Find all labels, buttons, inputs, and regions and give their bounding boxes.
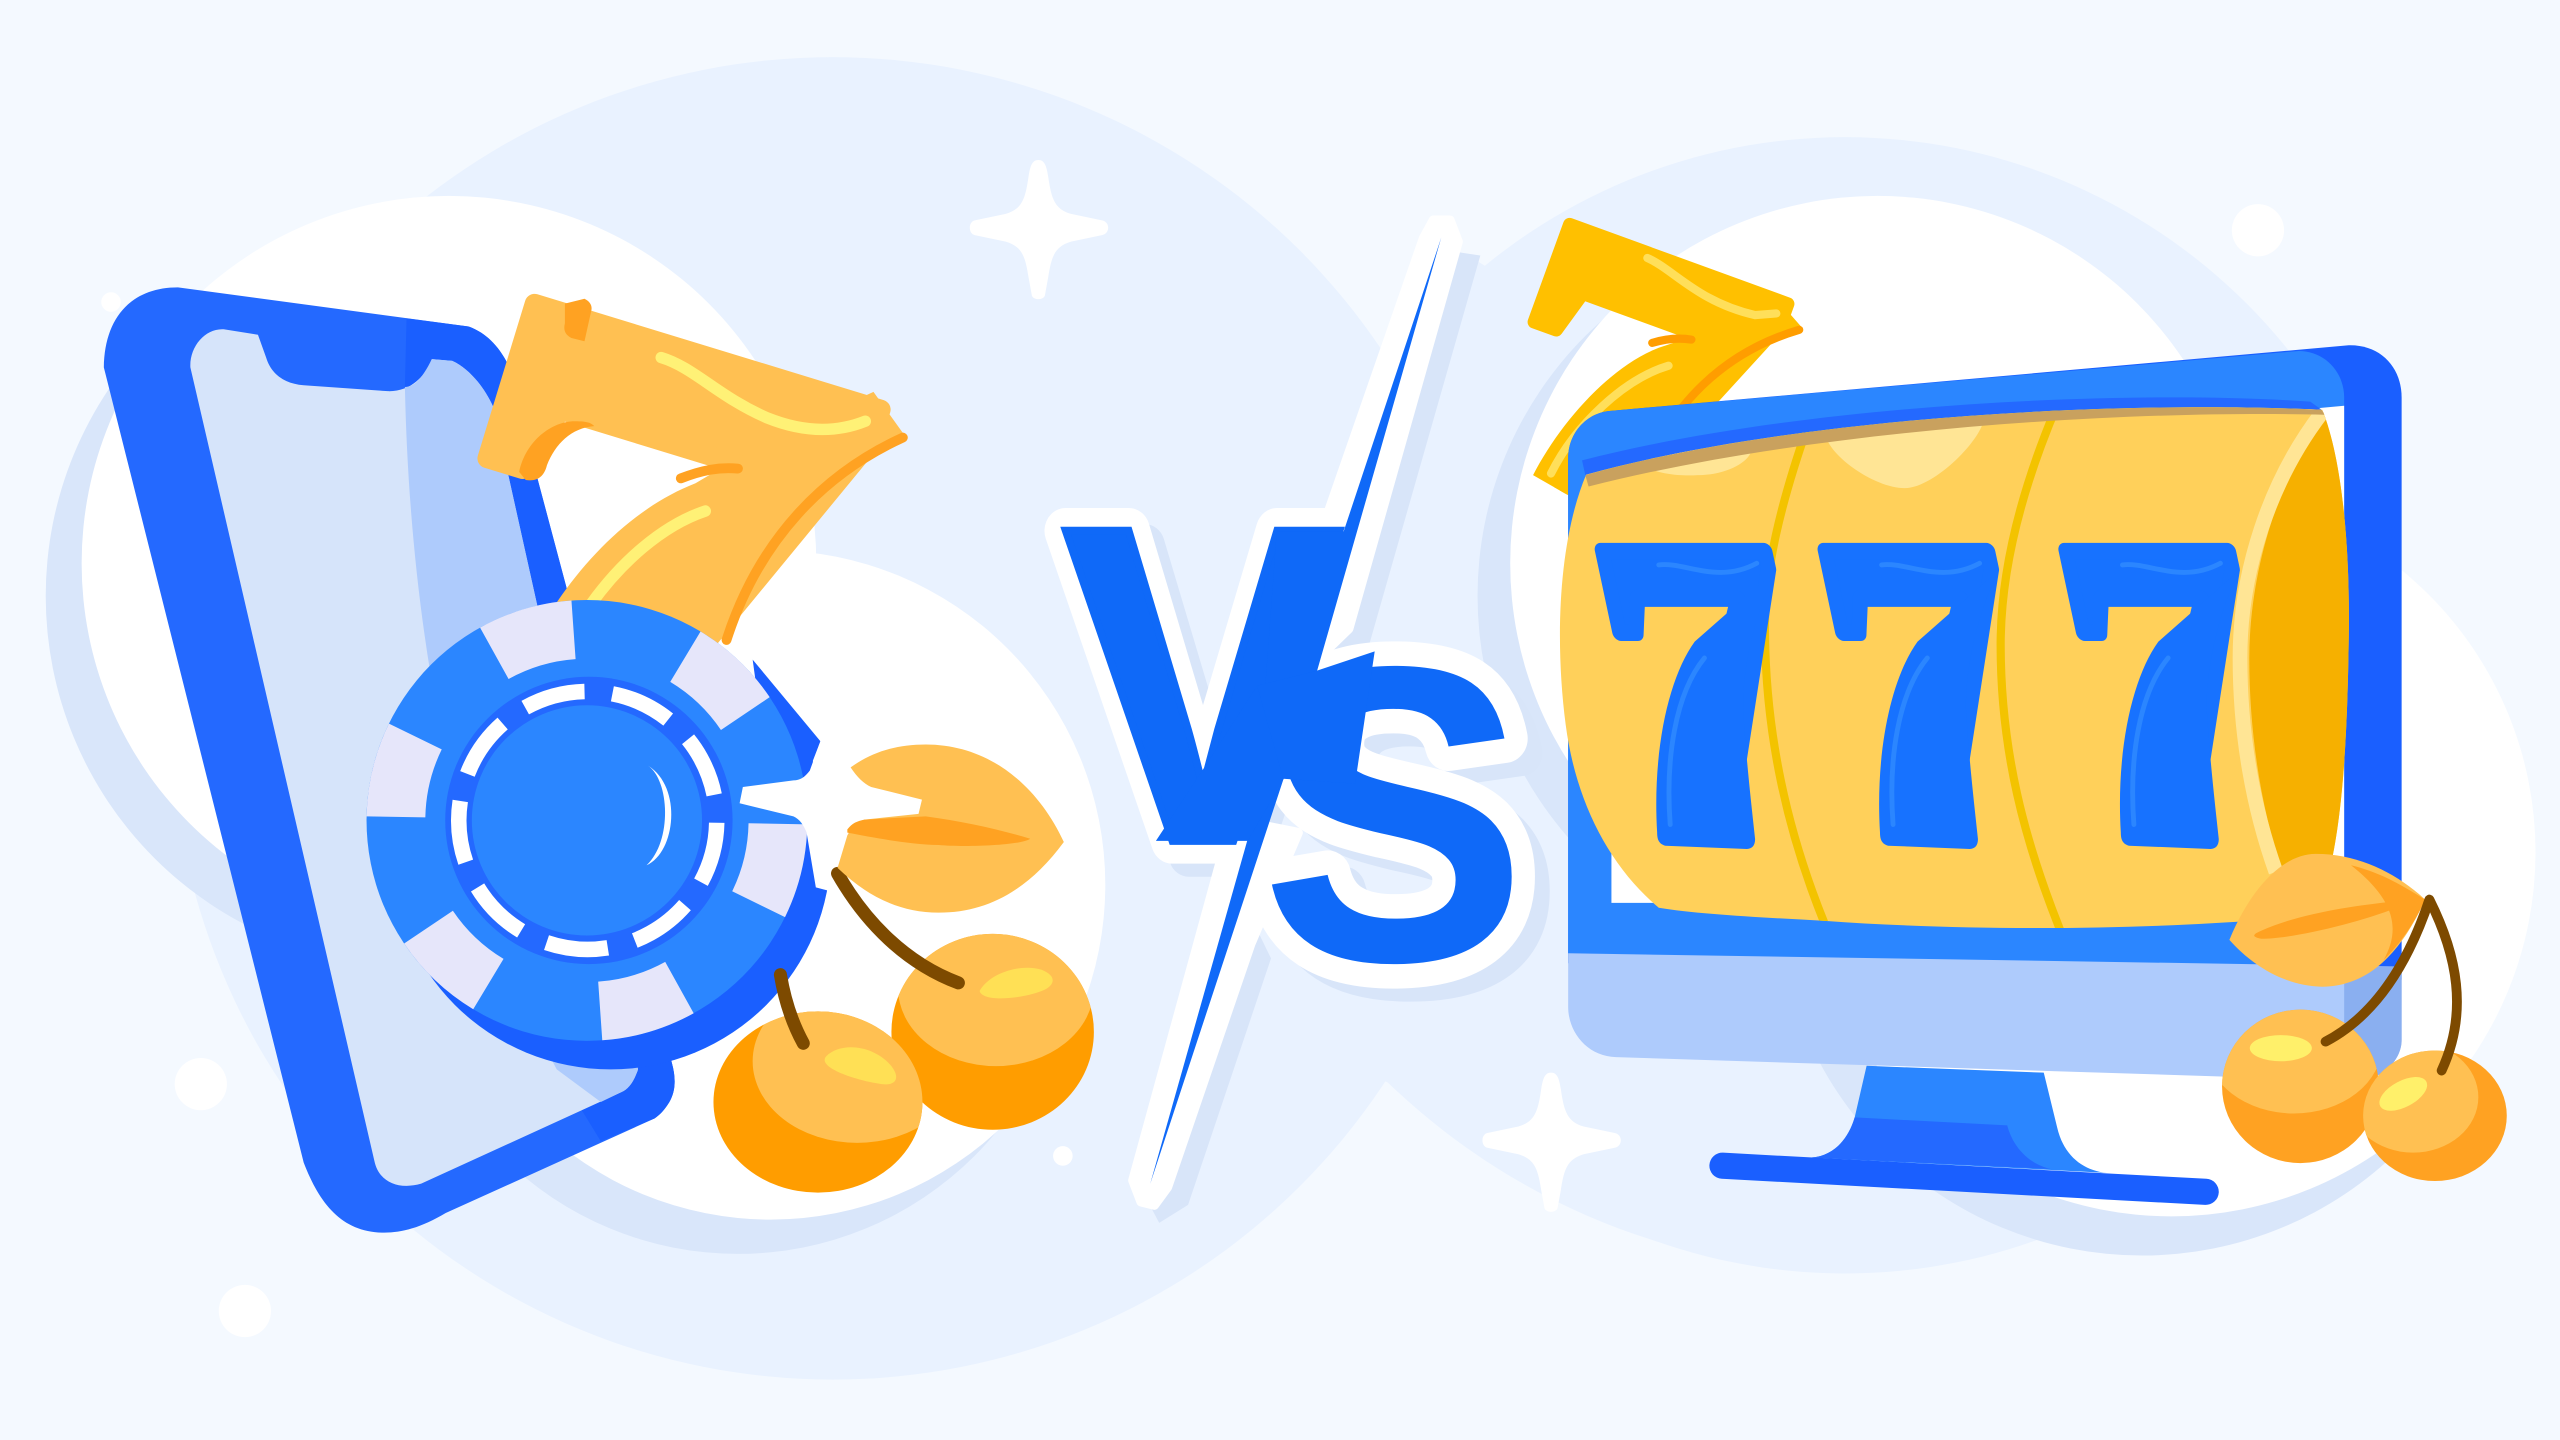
lightning bolt — [1265, 237, 1441, 686]
decorative dots — [101, 204, 2284, 1337]
slot seven left: 7 — [267, 95, 961, 1137]
reel brown band — [1585, 407, 2325, 487]
smartphone — [104, 287, 675, 1233]
leaf — [838, 744, 1064, 913]
reel end — [2249, 412, 2349, 866]
reel seven stems — [1656, 570, 2240, 849]
slot seven right: 7 — [1374, 91, 1845, 764]
vs outline — [1063, 220, 1527, 1205]
seven shadow edges — [681, 438, 903, 640]
seven right shadow — [1652, 330, 1799, 408]
reel sevens: 7 — [1781, 447, 2079, 932]
poker chip — [327, 561, 865, 1080]
vs letters: S — [1260, 580, 1527, 1050]
vs bolt and letters — [1063, 220, 1544, 1223]
icon: star bottom — [1482, 1073, 1621, 1212]
desktop monitor — [1558, 345, 2402, 1192]
slot seven right — [1528, 218, 1804, 495]
reel separators — [1765, 406, 2060, 931]
cherries right — [2206, 854, 2507, 1181]
cherry right — [2363, 1050, 2507, 1181]
reel top shadow — [1582, 397, 2322, 475]
monitor stand — [1722, 1066, 2206, 1192]
left white backdrop — [46, 196, 1105, 1254]
stems — [780, 873, 958, 1043]
vs outline: V — [1063, 434, 1344, 937]
seven right swoop — [1533, 302, 1802, 495]
chip notch — [740, 741, 865, 891]
monitor screen — [1611, 406, 2344, 903]
vs shadow — [1079, 249, 1544, 1223]
seven stem swoop — [553, 392, 906, 640]
reel seven highlights — [1659, 563, 2220, 824]
reel sevens: 7 — [1558, 447, 1856, 932]
cherries left — [713, 744, 1094, 1193]
reel sevens: 7 — [2022, 447, 2319, 932]
right cherry — [891, 934, 1094, 1130]
vs letters — [1063, 237, 1527, 1184]
seven right highlight — [1551, 258, 1776, 473]
cherry left — [2222, 1010, 2378, 1164]
leaf — [2229, 854, 2425, 987]
right white backdrop — [1478, 196, 2536, 1256]
vs letters: V — [1063, 434, 1344, 937]
icon: star top — [970, 160, 1108, 299]
reel sevens — [1558, 447, 2319, 932]
vs outline: S — [1260, 580, 1527, 1050]
seven highlight — [591, 358, 865, 604]
vs shadow: V — [1079, 449, 1361, 952]
monitor chin — [1568, 953, 2402, 1081]
chip rim stripes — [327, 561, 847, 1080]
monitor body — [1568, 345, 2402, 980]
slot reel — [1560, 406, 2359, 931]
stems — [2326, 900, 2457, 1071]
left cherry — [713, 1011, 922, 1193]
reel glints — [1656, 426, 1982, 488]
seven foot shade — [519, 299, 594, 480]
vs shadow: S — [1277, 594, 1544, 1065]
